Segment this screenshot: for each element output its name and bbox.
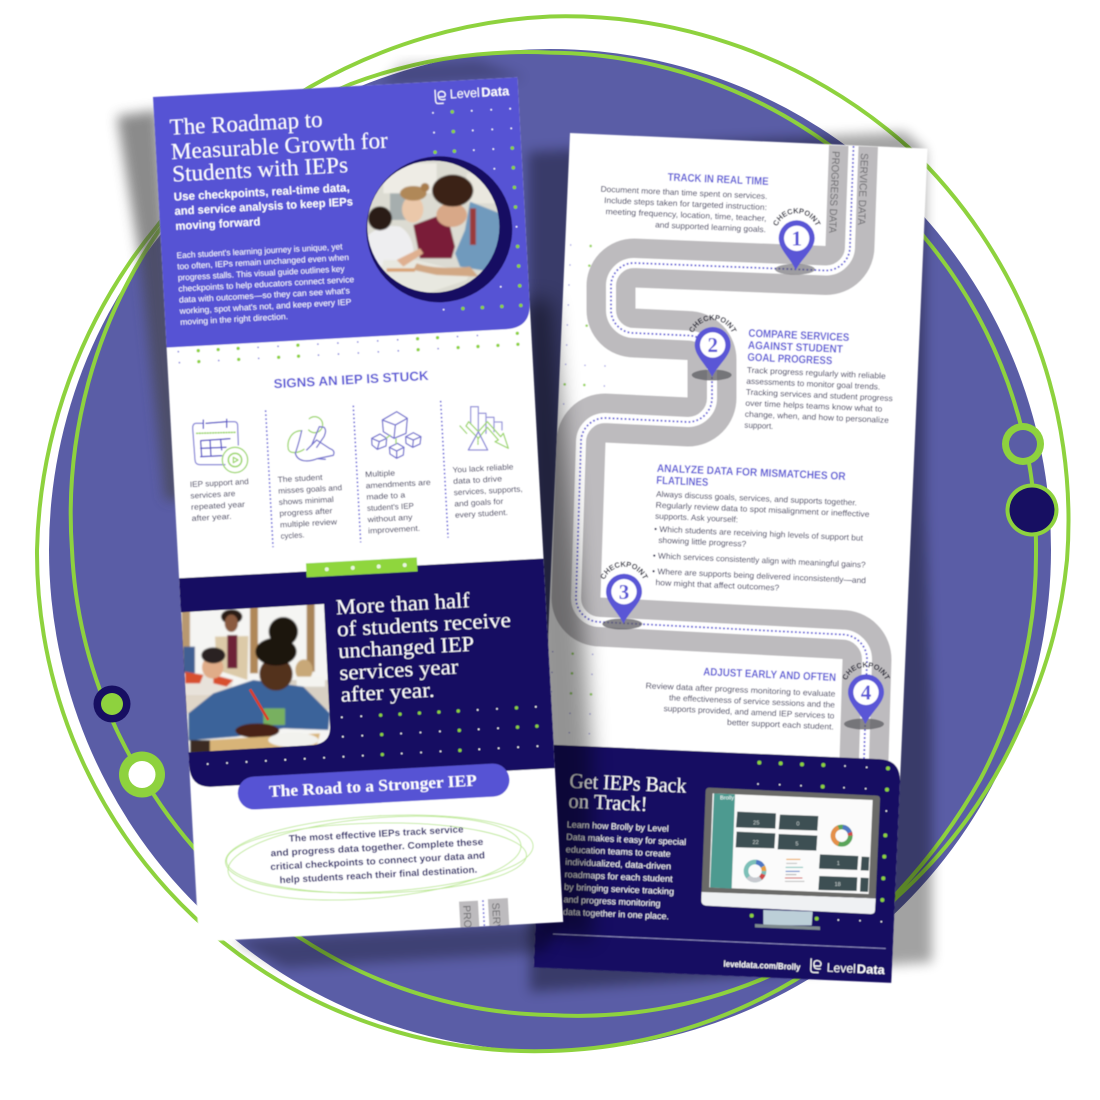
icon: dashboard monitor: Brolly xyxy=(720,795,734,801)
step 1 text: Include steps taken for targeted instruction: xyxy=(604,196,767,212)
step 3 text: Regularly review data to spot misalignment or ineffective xyxy=(655,501,870,519)
logo: Level Data: Level xyxy=(449,85,480,101)
step 3 text: Always discuss goals, services, and supports together. xyxy=(656,490,857,507)
footer body text: data together in one place. xyxy=(563,907,669,921)
checkpoint pin 2: CHECKPOINT xyxy=(689,314,738,333)
header block xyxy=(153,77,531,348)
photo ring xyxy=(362,152,516,306)
footer body text: roadmaps for each student xyxy=(564,869,673,884)
step 3 text: showing little progress? xyxy=(658,536,747,549)
road start lanes xyxy=(458,898,510,928)
sign 3 text: without any xyxy=(366,513,413,524)
subtitle: moving forward xyxy=(175,216,261,233)
sign 3 text: amendments are xyxy=(365,478,432,490)
subtitle xyxy=(174,182,354,233)
road label: service data: SERVICE DATA xyxy=(855,153,870,225)
intro text: checkpoints to help educators connect service xyxy=(178,274,355,294)
sign 2 text: cycles. xyxy=(280,530,305,541)
photo: students studying in circle xyxy=(363,157,503,297)
ring marker: green with navy centre xyxy=(1006,484,1058,536)
left page white sheet xyxy=(153,77,563,942)
header dots xyxy=(433,109,521,310)
dots under header xyxy=(178,333,518,363)
step 4 text: Review data after progress monitoring to evaluate xyxy=(645,681,836,699)
footer heading xyxy=(568,769,687,818)
title xyxy=(169,103,390,187)
intro text: moving in the right direction. xyxy=(180,311,288,327)
icon: dashboard monitor: 25 xyxy=(753,820,759,826)
sign 3 text: student's IEP xyxy=(367,501,414,513)
stat text: after year. xyxy=(340,678,435,707)
step 1 text xyxy=(599,169,769,234)
sign 2 text: The student xyxy=(277,473,324,484)
step 2 text: change, when, and how to personalize xyxy=(745,410,889,425)
footer dots xyxy=(752,763,888,922)
icon: dashboard monitor: 22 xyxy=(753,840,759,846)
checkpoint pin 1: CHECKPOINT xyxy=(772,208,822,226)
footer body text: education teams to create xyxy=(566,844,671,859)
checkpoint pin 4: 4 xyxy=(861,680,872,704)
step 4 text: the effectiveness of service sessions and the xyxy=(669,693,836,710)
footer url: leveldata.com/Brolly xyxy=(723,959,801,972)
footer body text: by bringing service tracking xyxy=(564,882,674,897)
checkpoint pin 4 xyxy=(842,662,890,730)
heading: signs an IEP is stuck: SIGNS AN IEP IS STUCK xyxy=(273,368,429,391)
sign 4 text: services, supports, xyxy=(453,484,523,497)
sign 1 text: IEP support and xyxy=(190,477,249,489)
step 2 text: Tracking services and student progress xyxy=(746,388,893,403)
sign 3 text xyxy=(364,467,434,536)
sign 4 text: every student. xyxy=(455,508,508,520)
checkpoint pin 2 xyxy=(689,314,738,382)
ring marker: green with purple centre xyxy=(1002,423,1044,465)
navy band dots xyxy=(206,707,538,764)
step 4 text xyxy=(644,664,837,732)
title: The Roadmap to xyxy=(169,107,323,140)
step 1 text: and supported learning goals. xyxy=(655,220,766,234)
sign 2 text: shows minimal xyxy=(279,495,334,507)
inner green ring xyxy=(71,52,1036,1016)
title: Students with IEPs xyxy=(172,152,349,187)
footer body text: individualized, data-driven xyxy=(565,857,671,871)
step 3 text: • Where are supports being delivered inconsistently—and xyxy=(652,567,867,585)
faint dots beside road xyxy=(564,245,605,404)
road start lanes: SERVICE DATA xyxy=(489,902,505,978)
sign 4 text: You lack reliable xyxy=(452,462,514,475)
sign 3 text: improvement. xyxy=(368,524,420,535)
step 3 text: supports. Ask yourself: xyxy=(655,512,738,524)
sign 2 text: misses goals and xyxy=(278,483,342,496)
step 1 text: TRACK IN REAL TIME xyxy=(667,172,769,188)
checkpoint pin 4: CHECKPOINT xyxy=(842,662,890,680)
road intro text xyxy=(269,823,486,887)
panel: right page roadmap xyxy=(534,132,928,984)
step 2 text xyxy=(744,328,896,436)
title: Measurable Growth for xyxy=(170,128,389,164)
shadow: left page left wedge xyxy=(117,110,185,500)
step 2 text: assessments to monitor goal trends. xyxy=(746,377,880,392)
shadow: right page xyxy=(528,132,932,992)
step 3 text: how might that affect outcomes? xyxy=(655,578,780,593)
step 4 text: ADJUST EARLY AND OFTEN xyxy=(703,666,836,684)
footer heading: Get IEPs Back xyxy=(569,769,687,798)
sign 4 text: data to drive xyxy=(453,474,503,486)
icon: falling bars warning xyxy=(460,407,508,450)
logo: Level Data: Data xyxy=(481,83,510,100)
footer logo xyxy=(811,958,886,977)
ring marker: navy with green centre xyxy=(94,686,130,722)
footer body text: Data makes it easy for special xyxy=(566,832,686,847)
step 2 text: support. xyxy=(744,421,774,431)
step 3 text: • Which students are receiving high levels of support but xyxy=(654,525,864,543)
sign 1 text: repeated year xyxy=(191,500,246,512)
road label: progress data: PROGRESS DATA xyxy=(826,151,841,233)
road start lanes: PROGRESS DATA xyxy=(460,905,477,994)
stat text: of students receive xyxy=(336,608,511,641)
sign 3 text: Multiple xyxy=(365,468,396,479)
dotted column dividers xyxy=(266,401,448,547)
sign 1 text xyxy=(190,477,251,523)
footer logo: Data xyxy=(857,962,886,977)
footer body text: Learn how Brolly by Level xyxy=(567,819,669,834)
intro text: progress stalls. This visual guide outlines key xyxy=(178,263,346,283)
sign 2 text: multiple review xyxy=(280,517,338,529)
road intro text: help students reach their final destination. xyxy=(279,865,478,886)
sign 4 text: and goals for xyxy=(454,497,504,508)
subtitle: Use checkpoints, real-time data, xyxy=(174,182,350,204)
right page white sheet xyxy=(534,133,928,983)
step 2 text: COMPARE SERVICES xyxy=(748,328,850,344)
checkpoint pin 3 xyxy=(600,561,649,630)
faint dots below road xyxy=(551,652,593,734)
right page navy footer xyxy=(534,744,901,983)
icon: cubes xyxy=(372,412,421,458)
step 2 text: GOAL PROGRESS xyxy=(747,352,833,367)
step 2 text: Track progress regularly with reliable xyxy=(747,366,886,381)
road intro text: and progress data together. Complete these xyxy=(270,837,484,859)
shadow: left page top xyxy=(380,60,525,86)
sign 1 text: services are xyxy=(190,489,236,500)
step 4 text: supports provided, and amend IEP services to xyxy=(663,704,835,721)
footer body text xyxy=(563,819,687,922)
stat text: unchanged IEP xyxy=(338,632,475,663)
checkpoint pin 2: 2 xyxy=(707,333,718,357)
intro text: working, spot what's not, and keep every IEP xyxy=(178,297,352,316)
stat text: More than half xyxy=(335,588,471,619)
checkpoint pin 1 xyxy=(772,208,822,276)
ring marker: green with white centre xyxy=(119,752,165,798)
subtitle: and service analysis to keep IEPs xyxy=(174,196,353,218)
checkpoint pin 1: 1 xyxy=(791,227,802,251)
intro text: data with outcomes—so they can see what's xyxy=(179,285,350,305)
intro text: Each student's learning journey is unique, yet xyxy=(176,241,343,260)
step 3 text: ANALYZE DATA FOR MISMATCHES OR xyxy=(657,463,846,483)
step 3 text xyxy=(651,463,872,596)
icon: calendar with gear xyxy=(193,419,248,473)
step 4 text: better support each student. xyxy=(727,718,834,732)
step 2 text: AGAINST STUDENT xyxy=(748,340,843,356)
sign 4 text xyxy=(452,462,524,520)
icon: dashboard monitor: 18 xyxy=(835,882,841,888)
panel: left page xyxy=(153,77,567,1009)
navy stat band xyxy=(179,559,555,788)
logo: Level Data xyxy=(435,83,510,104)
shadow: left page right side xyxy=(520,300,592,940)
green tab xyxy=(306,557,418,577)
step 2 text: over time helps teams know what to xyxy=(745,399,883,414)
sign 2 text xyxy=(277,472,345,541)
sign 1 text: after year. xyxy=(191,512,232,523)
pill: road to a stronger IEP xyxy=(237,763,510,810)
footer logo: Level xyxy=(827,961,856,976)
step 3 text: FLATLINES xyxy=(656,475,709,489)
stat text xyxy=(335,586,515,707)
shadow: left page bottom xyxy=(232,922,560,968)
right page text xyxy=(552,168,920,977)
icon: dashboard monitor: 1 xyxy=(837,861,840,867)
intro text: too often, IEPs remain unchanged even when xyxy=(177,252,350,271)
footer heading: on Track! xyxy=(568,789,648,816)
road intro text: The most effective IEPs track service xyxy=(289,824,464,845)
road intro text: critical checkpoints to connect your data and xyxy=(270,850,486,873)
sign 2 text: progress after xyxy=(279,506,333,518)
icon: dashboard monitor: 5 xyxy=(795,841,799,847)
icon: student with backpack xyxy=(288,417,334,461)
photo: girl writing in classroom xyxy=(177,600,337,757)
stat text: services year xyxy=(339,655,459,685)
footer body text: and progress monitoring xyxy=(563,894,661,908)
scribbled ellipses xyxy=(223,804,536,911)
intro text xyxy=(175,241,357,327)
sign 3 text: made to a xyxy=(366,491,406,502)
road: service and progress lanes xyxy=(576,146,867,760)
pill: road to a stronger IEP: The Road to a Stronger IEP xyxy=(269,771,477,801)
step 3 text: • Which services consistently align with meaningful gains? xyxy=(653,551,866,570)
checkpoint pin 3: CHECKPOINT xyxy=(600,561,649,580)
icon: dashboard monitor xyxy=(701,788,880,930)
icon: dashboard monitor: 0 xyxy=(796,821,800,827)
step 1 text: meeting frequency, location, time, teacher, xyxy=(605,207,767,223)
checkpoint pin 3: 3 xyxy=(619,580,629,604)
step 1 text: Document more than time spent on services. xyxy=(600,185,768,201)
